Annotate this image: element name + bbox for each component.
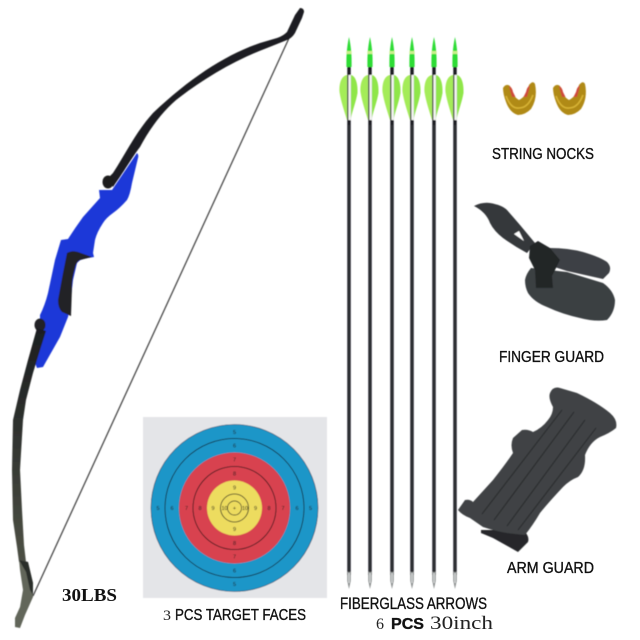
target numbers: 8 [198,506,202,512]
target numbers: 7 [233,554,236,560]
label: 6 pcs 30inch: PCS [391,616,424,633]
target numbers [156,430,312,588]
label: 3 PCS target faces: PCS TARGET FACES [175,607,306,624]
target numbers: 6 [295,506,299,512]
grip [58,251,92,316]
target numbers: 9 [233,527,236,533]
target numbers: 8 [233,541,236,547]
finger guard [474,203,615,321]
knot and tab [529,241,560,288]
target numbers: 5 [309,506,312,512]
target numbers: 7 [185,506,188,512]
upper limb bolt [102,176,114,188]
riser blue [35,153,138,368]
target numbers: 7 [233,458,236,464]
label: 3 PCS target faces: 3 [163,608,171,624]
target numbers: 9 [211,506,215,512]
target numbers: 5 [233,582,236,588]
guard ribs [482,410,596,530]
target numbers: 10 [242,506,248,512]
target numbers: 8 [267,506,271,512]
target numbers: 7 [281,506,285,512]
label: 6 pcs 30inch [376,613,494,634]
target numbers: 5 [233,430,236,436]
target numbers: 9 [233,486,236,492]
lower limb tip [15,560,33,628]
label: arm guard: ARM GUARD [507,560,594,577]
target numbers: 10 [221,506,228,512]
label: string nocks: STRING NOCKS [492,146,594,163]
target paper [143,417,327,598]
arm guard [458,388,616,552]
upper limb [108,8,304,187]
label: 6 pcs 30inch: 6 [376,616,384,633]
target numbers: 9 [254,506,257,512]
target numbers: + [233,506,236,512]
upper pad [545,248,610,279]
bow string [33,36,290,596]
guard body [458,388,616,535]
label: 6 pcs 30inch: 30inch [430,613,494,634]
lower limb bolt [34,318,46,332]
lower pad [525,268,615,321]
target numbers: 8 [233,472,236,478]
lower limb [12,328,46,562]
target numbers: 6 [170,506,174,512]
label: fiberglass arrows: FIBERGLASS ARROWS [340,595,487,613]
target rings [151,424,318,592]
target numbers: 6 [233,568,236,574]
arrows [339,37,464,589]
lower strap [481,530,528,552]
string nocks [503,82,586,115]
target face [143,417,327,598]
strap [474,203,535,253]
bow [12,8,304,628]
label: 30LBS: 30LBS [62,585,117,605]
label: finger guard: FINGER GUARD [499,349,604,366]
target numbers: 5 [156,506,160,512]
target numbers: 6 [233,444,236,450]
